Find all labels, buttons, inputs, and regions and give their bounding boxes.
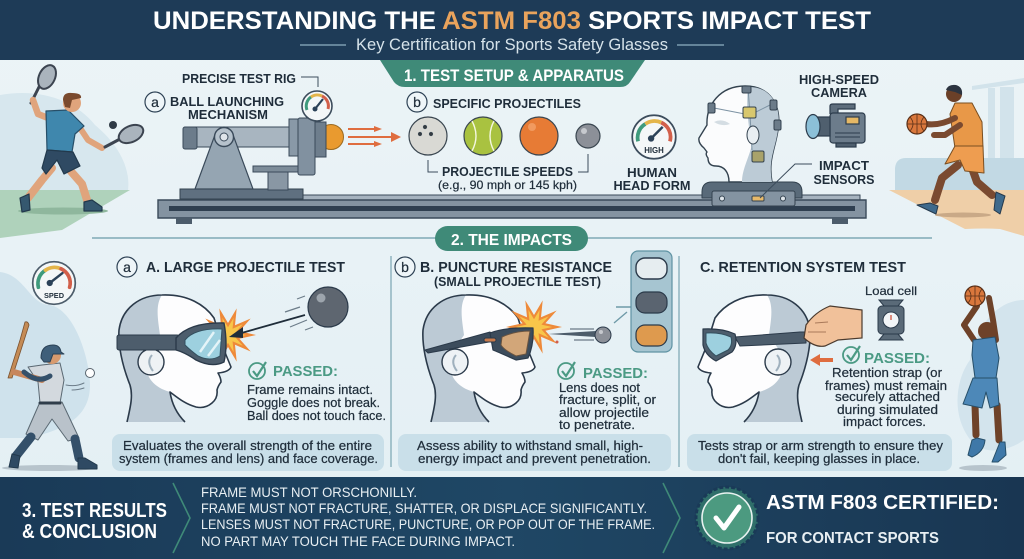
- note box A: system (frames and lens) and face coverage.: [119, 452, 378, 466]
- label: ball launching mechanism: BALL LAUNCHING: [170, 94, 284, 109]
- note box B: [398, 434, 671, 471]
- note box B: Assess ability to withstand small, high-: [417, 439, 643, 453]
- orange ball in launcher: [318, 124, 344, 150]
- rail: [158, 195, 866, 224]
- load cell: Load cell: [865, 284, 917, 298]
- label: projectile speeds: (e.g., 90 mph or 145 kph): [438, 178, 577, 192]
- ball A with trajectory: [229, 287, 348, 338]
- note box B: energy impact and prevent penetration.: [418, 452, 651, 466]
- certified text: [766, 492, 999, 547]
- label: high-speed camera: [799, 73, 879, 100]
- goggles C: [703, 329, 806, 361]
- heading B: B. PUNCTURE RESISTANCE: [420, 259, 612, 276]
- passed B: allow projectile: [559, 406, 649, 420]
- section 3 heading: [22, 500, 167, 543]
- label: specific projectiles: [407, 92, 581, 112]
- footer band: [0, 477, 1024, 559]
- background scene: baseball blob: [0, 272, 90, 438]
- label: specific projectiles: b: [413, 94, 421, 110]
- passed C: during simulated: [837, 403, 938, 417]
- baseball: [66, 368, 94, 390]
- note box C: don't fail, keeping glasses in place.: [718, 452, 920, 466]
- label: human head form: HUMAN: [627, 166, 677, 180]
- heading B: (SMALL PROJECTILE TEST): [434, 275, 601, 289]
- label: impact sensors: SENSORS: [814, 173, 874, 187]
- goggles A: [117, 323, 226, 365]
- passed B: [558, 362, 656, 432]
- label: high-speed camera: HIGH-SPEED: [799, 73, 879, 87]
- section 3 heading: & CONCLUSION: [22, 521, 157, 543]
- heading B: [395, 257, 612, 289]
- passed B: to penetrate.: [559, 418, 635, 432]
- passed C: frames) must remain: [825, 379, 947, 393]
- certified text: FOR CONTACT SPORTS: [766, 530, 939, 547]
- basketball player, shooting: [959, 286, 1007, 471]
- label: specific projectiles: SPECIFIC PROJECTILES: [433, 96, 581, 111]
- label: precise test rig: PRECISE TEST RIG: [182, 72, 296, 86]
- background scene: right basketball gym: [889, 78, 1024, 236]
- sports glasses B: [425, 328, 533, 360]
- label: human head form: [614, 166, 690, 193]
- baseball player: [2, 262, 98, 471]
- tennis player: [18, 62, 146, 214]
- racket up: [31, 62, 60, 103]
- subtitle: Key Certification for Sports Safety Glasses: [356, 36, 668, 54]
- heading A: A. LARGE PROJECTILE TEST: [146, 259, 345, 276]
- results list: LENSES MUST NOT FRACTURE, PUNCTURE, OR POP OUT OF THE FRAME.: [201, 516, 655, 532]
- speed gauge: [33, 262, 75, 304]
- note box A: [112, 434, 384, 471]
- heading B: b: [401, 259, 409, 275]
- label: projectile speeds: PROJECTILE SPEEDS: [442, 165, 573, 179]
- section 2 pill: 2. THE IMPACTS: [451, 232, 572, 249]
- basketball: [907, 114, 927, 134]
- label: human head form: HEAD FORM: [614, 179, 690, 193]
- load cell: [865, 284, 917, 340]
- passed A: [247, 362, 386, 423]
- section 3 heading: 3. TEST RESULTS: [22, 500, 167, 522]
- note box C: [687, 434, 952, 471]
- label: ball launching mechanism: [145, 92, 284, 122]
- certified badge: [696, 487, 758, 549]
- note box C: Tests strap or arm strength to ensure they: [698, 439, 944, 453]
- title: UNDERSTANDING THE ASTM F803 SPORTS IMPACT TEST: [153, 7, 871, 35]
- label: high-speed camera: CAMERA: [811, 86, 867, 100]
- heading A: a: [123, 259, 131, 275]
- heading C: C. RETENTION SYSTEM TEST: [700, 259, 906, 276]
- section 2 divider: [92, 237, 932, 239]
- header band: [0, 0, 1024, 60]
- panel: B. puncture resistance: [395, 251, 672, 471]
- speed gauge: SPED: [44, 291, 65, 300]
- passed C: impact forces.: [843, 415, 926, 429]
- label: impact sensors: [760, 159, 874, 198]
- certified text: ASTM F803 CERTIFIED:: [766, 492, 999, 514]
- head B: [423, 295, 535, 422]
- passed A: Frame remains intact.: [247, 383, 373, 397]
- passed A: Ball does not touch face.: [247, 409, 386, 423]
- label: projectile speeds: [428, 154, 588, 192]
- icon: camera: [806, 104, 865, 147]
- barrel: [183, 127, 290, 149]
- note box A: Evaluates the overall strength of the entire: [123, 439, 372, 453]
- background scene: right basketball blob: [958, 300, 1024, 450]
- head A: [119, 295, 231, 422]
- passed C: PASSED:: [864, 350, 930, 367]
- passed B: fracture, split, or: [559, 393, 656, 407]
- passed C: securely attached: [835, 390, 940, 404]
- basketball: [965, 286, 985, 306]
- A-frame: [195, 127, 253, 189]
- panel: A. large projectile test: [112, 257, 386, 471]
- high speed gauge: HIGH: [644, 146, 664, 155]
- passed B: PASSED:: [583, 365, 648, 382]
- label: ball launching mechanism: a: [151, 94, 159, 110]
- test rig: [158, 91, 866, 224]
- section 2 pill: [435, 226, 588, 251]
- gauge: [302, 91, 332, 121]
- label: ball launching mechanism: MECHANISM: [188, 107, 268, 122]
- label: impact sensors: IMPACT: [819, 159, 869, 173]
- head C: [698, 295, 810, 422]
- arrow: pull force: [810, 354, 833, 366]
- lens options panel: [614, 251, 672, 352]
- passed A: PASSED:: [273, 363, 338, 380]
- basketball player, dribbling: [907, 85, 1005, 217]
- hand pulling strap: [804, 306, 862, 346]
- results list: FRAME MUST NOT ORSCHONILLY.: [201, 484, 417, 500]
- results list: FRAME MUST NOT FRACTURE, SHATTER, OR DISPLACE SIGNIFICANTLY.: [201, 500, 647, 516]
- passed C: [825, 346, 947, 429]
- launcher base: [180, 189, 303, 199]
- results list: [201, 484, 655, 549]
- launcher head: [289, 118, 326, 175]
- panel: C. retention system test: [687, 259, 952, 471]
- head form with sensors: [699, 86, 802, 206]
- results list: NO PART MAY TOUCH THE FACE DURING IMPACT.: [201, 533, 515, 549]
- small ball B: [548, 327, 611, 344]
- burst B: [506, 300, 562, 354]
- racket forward: [105, 121, 146, 147]
- passed B: Lens does not: [559, 381, 641, 395]
- passed C: Retention strap (or: [832, 366, 942, 380]
- background scene: left tennis court: [0, 93, 130, 238]
- section 1 tab: [380, 60, 645, 87]
- burst A: [200, 308, 256, 362]
- projectile balls: [409, 117, 600, 155]
- support: [253, 166, 299, 190]
- high speed gauge: [632, 115, 676, 159]
- section 1 tab: 1. TEST SETUP & APPARATUS: [404, 67, 624, 85]
- arrows: launch direction: [348, 126, 401, 147]
- passed A: Goggle does not break.: [247, 396, 380, 410]
